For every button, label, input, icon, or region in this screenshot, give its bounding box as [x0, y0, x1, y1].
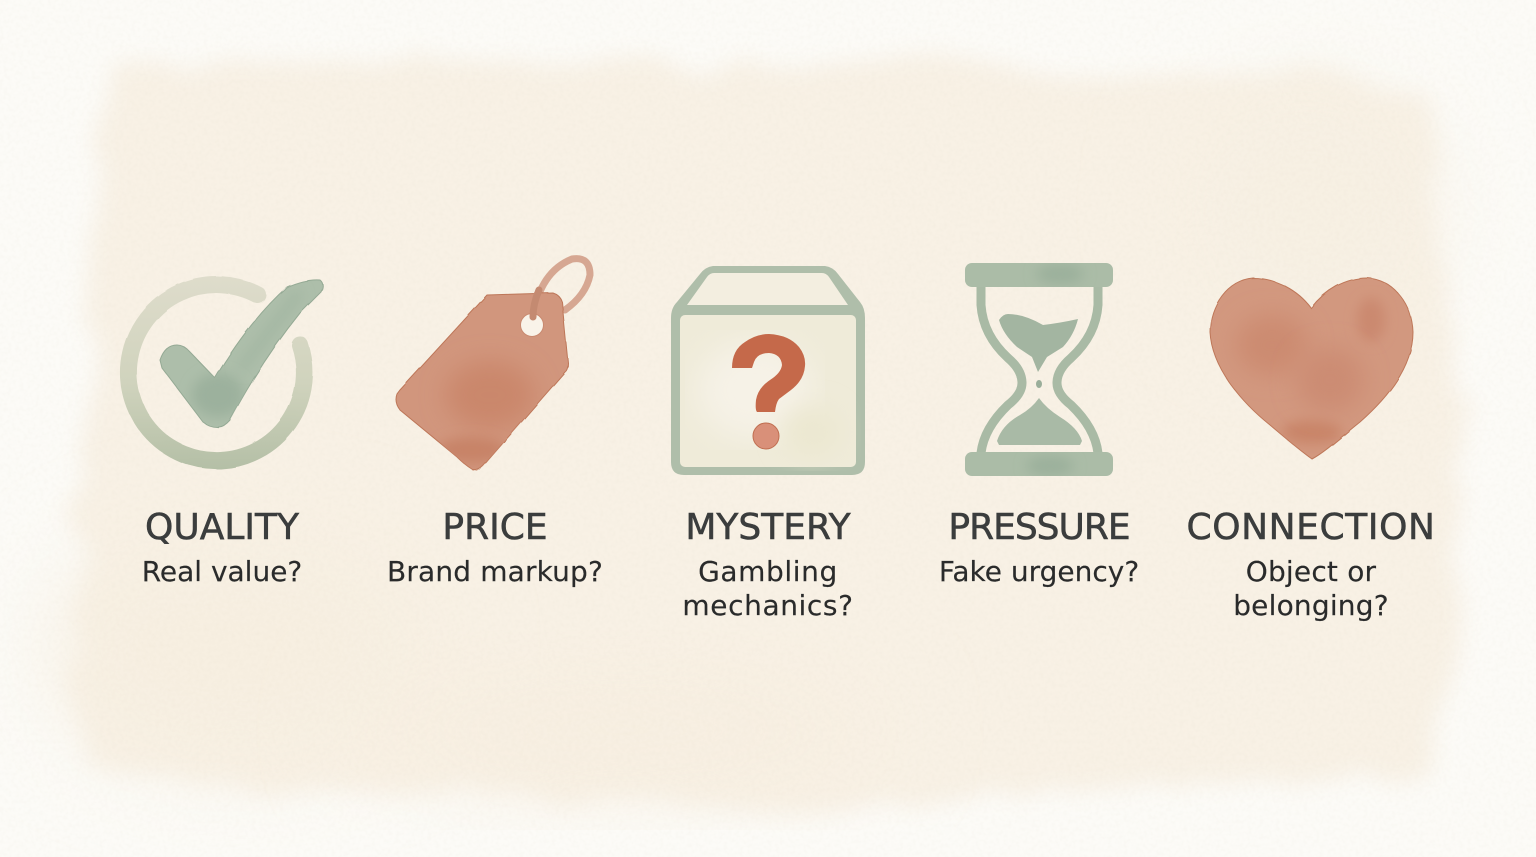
- label: connection: Object or: [1246, 555, 1376, 588]
- icon: hourglass: [965, 263, 1113, 476]
- label: mystery: Gambling: [698, 555, 838, 588]
- label: mystery: [682, 507, 854, 622]
- icon: price tag: [396, 259, 590, 470]
- label: pressure: Fake urgency?: [939, 555, 1139, 588]
- label: quality: QUALITY: [145, 507, 299, 548]
- icon: heart: [1210, 278, 1413, 459]
- label: pressure: [939, 507, 1139, 588]
- label: price: [387, 507, 603, 588]
- question dot: [753, 423, 779, 449]
- icon: mystery box: [671, 266, 865, 475]
- label: quality: Real value?: [142, 555, 302, 588]
- icon: check mark in circle: [128, 280, 323, 461]
- question mark: [732, 334, 805, 412]
- label: price: PRICE: [442, 507, 548, 548]
- label: connection: CONNECTION: [1186, 507, 1436, 548]
- label: connection: [1186, 507, 1436, 622]
- label: connection: belonging?: [1233, 589, 1389, 622]
- label: price: Brand markup?: [387, 555, 603, 588]
- label: quality: [142, 507, 302, 588]
- label: pressure: PRESSURE: [948, 507, 1130, 548]
- label: mystery: mechanics?: [682, 589, 854, 622]
- label: mystery: MYSTERY: [685, 507, 851, 548]
